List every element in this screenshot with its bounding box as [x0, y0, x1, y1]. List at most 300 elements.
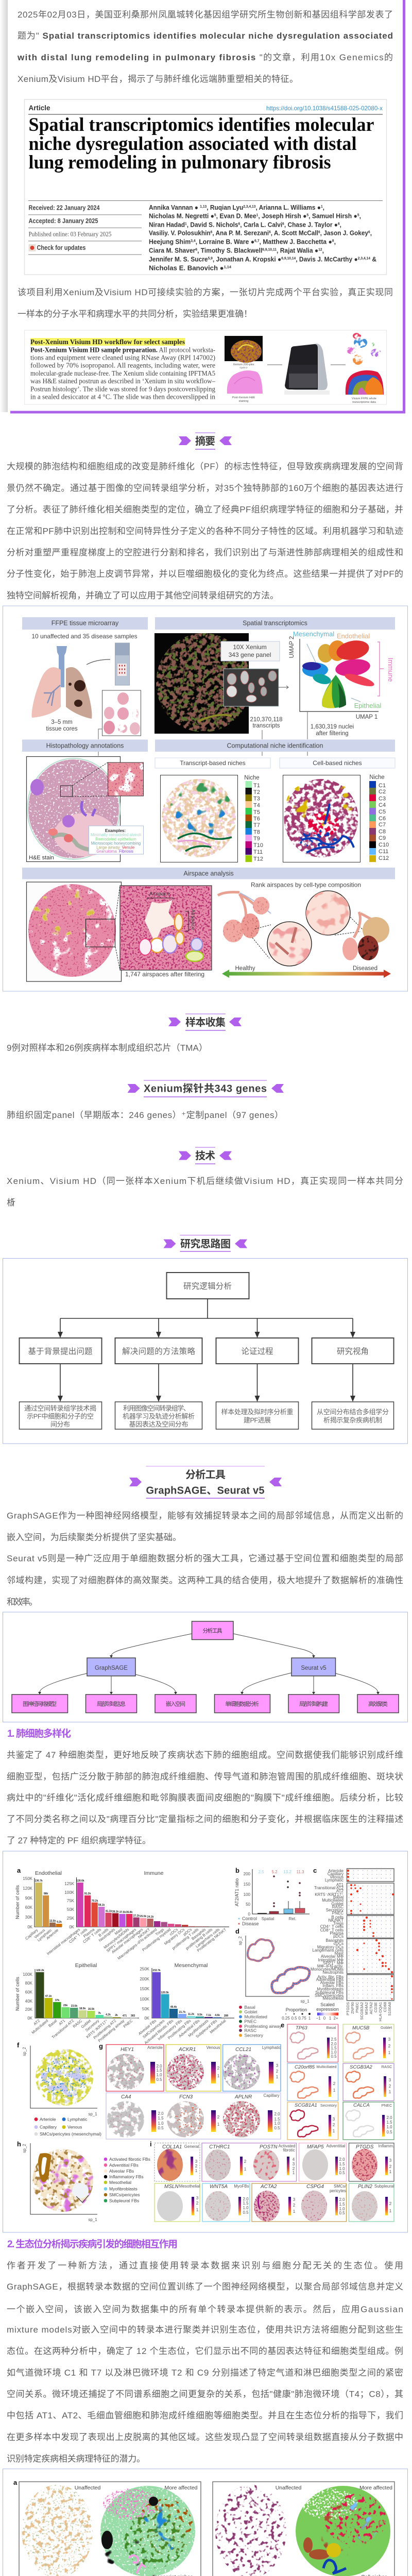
panel: figure 2 niche analysis: a [13, 2479, 18, 2486]
i: ACTA2 and CSPG4: 1.0 [339, 2207, 345, 2211]
callout: 10X Xenium panel: 10X Xenium [233, 643, 267, 651]
legend: transcript niches: T10 [253, 842, 263, 849]
text: analysis tools: 和效率。 [7, 1597, 38, 1607]
text: section 2: mixture models对嵌入空间中的转录本进行聚类并识别生态位，使用共识方法将细胞分配到这些生 [7, 2325, 403, 2335]
node: detail 1 [20, 1402, 102, 1429]
chart a: epithelial bars: RASC [72, 2018, 83, 2029]
text: technology [7, 1176, 403, 1208]
i: ACTA2 and CSPG4: pericytes [330, 2189, 346, 2193]
paper title screenshot: https://doi.org/10.1038/s41588-025-02080-x [266, 105, 383, 112]
paper title screenshot: , Timothy S. Blackwell [197, 247, 262, 255]
e: MUC5B: 3 [388, 2037, 391, 2042]
chart a: mesenchymal bars: 150K [140, 1987, 150, 1991]
i: MFAP5 [299, 2143, 346, 2181]
image: H&E stain annotation [27, 756, 143, 861]
chart a: mesenchymal bars: Inflammatory FBs [157, 2018, 183, 2041]
node: detail 1: 间分布 [50, 1420, 70, 1428]
illustration: lungs: tissue cores [46, 726, 78, 732]
legend: airway cell types: Multiciliated [244, 2014, 267, 2020]
paper title screenshot: 1,13 [200, 205, 207, 209]
methods screenshot: post-Xenium Visium HD workflow: in a sealed desiccator at 4 °C. The slide was then decoverslipped in [30, 393, 215, 401]
legend: annotation examples: Remodeled epithelium [95, 837, 136, 842]
paper title screenshot: , [322, 247, 324, 255]
chart a: epithelial bars: Multiciliated [30, 2019, 49, 2035]
chart b: AT2/AT1 ratio box plot: Control [242, 1916, 257, 1921]
chart a: epithelial bars: 40K [25, 1999, 33, 2004]
e: CALCA: PNEC [382, 2103, 392, 2108]
e: SCGB1A1: 2 [333, 2123, 335, 2127]
node: perspective: 研究视角 [337, 1347, 369, 1356]
chart a: epithelial bars: 60K [25, 1990, 33, 1995]
i: MFAP5: 1.5 [339, 2162, 345, 2166]
chart c: marker dot plot: Alveolar FBs [320, 1980, 344, 1985]
paper title screenshot: Received: 22 January 2024 [29, 204, 100, 211]
panel: graphical overview figure: Rank airspaces by cell-type composition [251, 881, 361, 888]
chart c: marker dot plot: SPP1⁺ MΦ [323, 1961, 344, 1965]
paper title screenshot: , David S. Nichols [187, 222, 238, 229]
chart b: AT2/AT1 ratio box plot: 50 [246, 1902, 251, 1907]
chart c: marker dot plot: PTGDS [346, 2002, 350, 2015]
subheader: Transcript-based niches: Transcript-based niches [180, 759, 246, 767]
text: technology: Xenium、Visium HD（同一张样本Xenium下机后继续做Visium HD，真正实现同一样本共同分 [7, 1176, 403, 1186]
legend: airway cell types: Basal [244, 2005, 255, 2010]
chart c: marker dot plot: AT2 [336, 1889, 344, 1893]
paper title screenshot: , Ana P. M. Serezani [212, 230, 269, 237]
legend: transcript niches: T9 [253, 836, 260, 842]
chart: UMAP of all nuclei: UMAP 2 [289, 636, 295, 658]
chart: UMAP of Visium [347, 333, 381, 365]
node: method strategy [115, 1338, 202, 1364]
chart c: marker dot plot: Tregs [333, 1921, 344, 1926]
image: Xenium brain section: Cycle 2 [239, 366, 248, 369]
paper title screenshot: lung remodeling in pulmonary fibrosis [29, 152, 331, 173]
i: ACTA2 and CSPG4: ACTA2 [260, 2184, 277, 2190]
e: C20orf85: 1 [333, 2088, 336, 2093]
text: section 1: 细胞亚型，包括广泛分散于肺部的肺泡成纤维细胞、传导气道和肺泡管周围的肌成纤维细胞、斑块状 [7, 1772, 403, 1782]
e: CALCA [343, 2102, 394, 2140]
chart a: endothelial bars: 90K [25, 1896, 33, 1901]
chart c: marker dot plot: Alveolar MΦ [321, 1954, 344, 1959]
paper title screenshot: , [370, 230, 372, 237]
chart a: immune bars: Tregs [154, 1927, 165, 1937]
legend: cell niches [369, 774, 389, 862]
methods screenshot: post-Xenium Visium HD workflow: was H&E stained postrun as described in ‘Xenium in situ workflow– [30, 377, 215, 385]
chart c: marker dot plot: Basophils [325, 1938, 344, 1943]
legend: annotation examples: Fibrosis [119, 849, 133, 854]
chart d: airway spatial map: sp_1 [300, 1999, 310, 2004]
chart b: AT2/AT1 ratio box plot: Disease [242, 1921, 259, 1926]
e: SCGB3A2: RASC [382, 2064, 392, 2069]
paper title screenshot: Niran Hadad [149, 222, 187, 229]
i: ACTA2 and CSPG4 [252, 2183, 347, 2222]
image: slide montage of cores [102, 690, 141, 736]
chart c: marker dot plot: Mast [335, 1951, 344, 1956]
panel e: airway gene maps [281, 2021, 394, 2140]
chart a: mesenchymal bars: 100K [140, 1997, 150, 2002]
g: capillary markers: 0.5 [274, 2126, 280, 2130]
legend: airway cell types: Secretory [244, 2033, 264, 2038]
g: HEY1 [106, 2044, 164, 2091]
chart c: marker dot plot: SCGB3A2 [359, 2002, 364, 2020]
legend: proportion and scaled expression: 0.25 [282, 2016, 290, 2021]
heading: 样本收集 [168, 1014, 242, 1030]
g: ACKR1 [166, 2044, 221, 2091]
chart a: epithelial bars: AT1 [58, 2019, 66, 2026]
chart b: AT2/AT1 ratio box plot: Ret. [289, 1917, 296, 1921]
e: SCGB1A1: 3 [333, 2117, 335, 2122]
chart c: marker dot plot: AT1 [336, 1883, 344, 1887]
legend: proportion and scaled expression: Proportion [286, 2007, 307, 2012]
e: SCGB3A2 [343, 2063, 394, 2101]
chart h: mesenchymal spatial map: sp_1 [88, 2217, 97, 2222]
callout: 10X Xenium panel [221, 641, 280, 661]
chart a: epithelial bars: 23.6k [71, 2005, 77, 2008]
e: C20orf85 [287, 2063, 338, 2101]
paper title screenshot: , Jonathan A. Kropski ● [213, 256, 281, 263]
chart a: immune bars: 0K [69, 1925, 75, 1929]
g: ACKR1: Venous [207, 2045, 220, 2050]
node: 嵌入空间 [155, 1694, 196, 1713]
chart a: immune bars: Plasma [82, 1927, 96, 1939]
chart: UMAP of all nuclei [289, 630, 394, 720]
text: section 2: 如气道微环境 C1 和 T7 以及淋巴微环境 T2 和 C9 分别描述了特定气道和淋巴细胞类型之间的紧密 [7, 2368, 403, 2378]
i: MFAP5: 0.5 [339, 2171, 345, 2175]
chart a: epithelial bars: 20K [25, 2007, 33, 2012]
chart a: epithelial bars: 37k [55, 1999, 59, 2002]
e: SCGB1A1 [287, 2102, 338, 2140]
chart a: endothelial bars: Venous [33, 1927, 46, 1940]
node: 图神经网络模型: 图神经网络模型 [23, 1700, 57, 1707]
node: detail 1: 通过空间转录组学技术揭 [24, 1404, 96, 1412]
heading: 技术: 技术 [195, 1150, 215, 1162]
chart a: epithelial bars: Number of cells [15, 1977, 21, 2011]
header bar: Airspace analysis [22, 868, 395, 879]
paper title screenshot: , Lorraine B. Ware ● [196, 238, 254, 245]
chart c: marker dot plot: PNEC [332, 1911, 344, 1916]
image: H&E brain section: staining [239, 400, 248, 403]
g: HEY1: 2.0 [156, 2064, 162, 2069]
legend: h cell types [104, 2157, 150, 2203]
paper title screenshot: Annika Vannan ● [149, 204, 201, 211]
e: SCGB1A1: 1 [333, 2129, 335, 2133]
chart a: immune bars: Alveolar macrophages [111, 1927, 144, 1955]
e: CALCA: 1.0 [386, 2125, 392, 2129]
e: TP63: TP63 [296, 2025, 307, 2031]
intro text continued [18, 287, 393, 319]
chart a: mesenchymal bars: 9.5k [197, 2013, 202, 2016]
panel: graphical overview figure [3, 606, 408, 991]
heading: 摘要: 摘要 [195, 435, 215, 447]
chart a: mesenchymal bars: 49.4k [170, 2006, 177, 2009]
chart a: endothelial bars: 150K [23, 1876, 33, 1881]
paper title screenshot [25, 99, 386, 275]
paper title screenshot: Check for updates [37, 244, 86, 251]
chart a: immune bars: 70.2k [92, 1900, 98, 1903]
paper title screenshot: 6,9,10,14 [281, 257, 296, 261]
subheader: Transcript-based niches [155, 758, 270, 768]
chart c: marker dot plot: cDCs [333, 1941, 344, 1946]
abstract text: 分析对重塑严重程度梯度上的空腔进行分割和排名，我们识别出了与渐进性肺部病理相关的组成性和 [7, 548, 403, 557]
g: capillary markers: 0.5 [158, 2126, 164, 2130]
image: H&E brain section: Post-Xenium H&E [232, 396, 255, 399]
e: MUC5B: MUC5B [352, 2025, 370, 2031]
chart a: epithelial bars: 4.2k [106, 2013, 111, 2016]
text: analysis tools: 嵌入空间，为后续聚类分析提供了坚实基础。 [7, 1532, 181, 1543]
icon: microarray slide [115, 643, 130, 685]
paper title screenshot: 6 [238, 223, 240, 226]
i: CTHRC1 and POSTN: POSTN [260, 2144, 278, 2150]
node: background question [20, 1338, 102, 1364]
g: capillary markers: 1.0 [158, 2121, 164, 2126]
g: HEY1: Arteriole [147, 2045, 163, 2050]
chart a: epithelial bars: Goblet [80, 2018, 92, 2029]
node: detail 3: 建PF进展 [244, 1416, 271, 1424]
legend: proportion and scaled expression: −1 [316, 2016, 321, 2021]
chart a: endothelial bars: Endothelial [35, 1870, 62, 1876]
image: H&E brain section [227, 370, 263, 403]
node: 局部邻域信息: 局部邻域信息 [97, 1700, 126, 1707]
i: MSLN: 3 [196, 2196, 199, 2200]
g: ACKR1: ACKR1 [178, 2047, 196, 2053]
chart c: marker dot plot: Lymphatic [325, 1878, 344, 1883]
chart a: endothelial bars: 0K [27, 1925, 33, 1929]
chart a: immune bars: 50K [67, 1907, 75, 1912]
node: detail 2: 利用图像空间转录组学、 [123, 1404, 190, 1412]
legend: proportion and scaled expression: 0.75 [298, 2016, 306, 2021]
header bar: Histopathology annotations: Histopathology annotations [46, 742, 124, 749]
image: airspace zoom inset: Airspace [190, 909, 196, 930]
labels: transcripts and nuclei counts: 210,370,118 [250, 717, 283, 723]
i: PLIN2: 2 [389, 2201, 392, 2206]
i: CTHRC1 and POSTN: CTHRC1 [209, 2144, 230, 2150]
legend: cell niches: C5 [379, 809, 386, 815]
text: section 2: 中包括 AT1、AT2、毛细血管细胞和肺泡成纤维细胞等细胞类型。并且在生态位分析的指导下，我们 [7, 2411, 403, 2420]
node: detail 2: 基因表达及空间分布 [129, 1420, 188, 1428]
chart c: marker dot plot: B cells [331, 1915, 344, 1920]
g: CCL21: CCL21 [235, 2047, 251, 2053]
labels: transcripts and nuclei counts [98, 711, 354, 739]
chart a: mesenchymal bars: 0K [144, 2016, 150, 2021]
image: airspace core [27, 882, 122, 981]
chart a: immune bars: 37.5k [119, 1911, 126, 1914]
chart a: mesenchymal bars: 233.7k [152, 1969, 161, 1972]
legend: h cell types: Myofibroblasts [109, 2187, 138, 2192]
chart b: AT2/AT1 ratio box plot: AT2/AT1 ratio [234, 1878, 239, 1906]
paper title screenshot: 5,9 [208, 257, 213, 261]
intro text continued: 该项目利用Xenium及Visium HD可接续实验的方案，一张切片完成两个平台实验，真正实现同 [18, 287, 393, 297]
paper title screenshot: Published online: 03 February 2025 [29, 231, 111, 238]
chart c: marker dot plot: Capillary [328, 1872, 344, 1876]
i: MSLN: 1 [196, 2208, 199, 2212]
g: HEY1: HEY1 [121, 2047, 134, 2053]
arrow [267, 364, 282, 365]
chart a: immune bars: pDCs [182, 1927, 193, 1937]
panel: graphical overview figure: 1,747 airspaces after filtering [125, 971, 204, 978]
i: COL1A1: 2 [195, 2164, 198, 2168]
panel: tools flowchart [3, 1612, 408, 1722]
paper title screenshot: & [370, 256, 376, 263]
chart a: mesenchymal bars: 11.2k [188, 2013, 194, 2016]
legend: f cell types: Capillary [40, 2125, 57, 2130]
paper title screenshot: 6,7 [254, 239, 260, 243]
chart a: immune bars: CD4⁺ T cells [68, 1927, 88, 1944]
chart a: immune bars: 128.6k [76, 1879, 84, 1883]
legend: airway cell types: RASC [244, 2028, 256, 2033]
chart a: mesenchymal bars: SMCs/pericytes [142, 2018, 165, 2039]
paper title screenshot: 1 [256, 213, 259, 217]
image: Xenium brain section [225, 336, 263, 369]
legend: transcript niches: T7 [253, 822, 260, 828]
paper title screenshot: 6 [282, 223, 284, 226]
panel: graphical overview figure: 10 unaffected and 35 disease samples [31, 633, 138, 640]
text: analysis tools: 邻域构建，实现了对细胞群体的高效聚类。这两种工具的结合使用，极大地提升了数据解析的准确性 [7, 1575, 403, 1585]
e: TP63: 1.0 [331, 2050, 337, 2055]
chart a: mesenchymal bars: 250K [140, 1967, 150, 1971]
i: PLIN2 [349, 2183, 394, 2222]
chart c: marker dot plot: CD4⁺ T cells [320, 1924, 344, 1929]
paper title screenshot: Heejung Shim [149, 238, 192, 245]
chart a: epithelial bars: 16.5k [88, 2008, 94, 2011]
panel i: fibroblast gene maps: i [150, 2140, 152, 2148]
chart a: immune bars: CD8⁺ T cells [82, 1927, 102, 1944]
i: WNT5A [202, 2183, 250, 2222]
i: PTGDS [349, 2143, 394, 2181]
paper title screenshot: 5 [357, 213, 359, 217]
g: HEY1: 0.5 [156, 2077, 162, 2082]
paper title screenshot: , Samuel Hirsh ● [308, 212, 357, 219]
g: capillary markers: 1.5 [274, 2117, 280, 2122]
i: MSLN: 2 [196, 2201, 199, 2206]
legend: airway cell types: PNEC [244, 2019, 256, 2024]
illustration: healthy to diseased alveoli [218, 891, 389, 966]
i: MFAP5: 2.0 [339, 2157, 345, 2162]
chart a: endothelial bars: a [17, 1867, 21, 1874]
paper title screenshot: , Evan D. Mee [216, 212, 256, 219]
chart a: immune bars: 41.1k [106, 1910, 112, 1913]
legend: cell niches: C11 [379, 849, 388, 855]
chart a: immune bars: Mast [114, 1927, 124, 1936]
chart a: endothelial bars: 120K [23, 1886, 33, 1891]
e: MUC5B [343, 2024, 394, 2062]
paper title screenshot: 3,4 [191, 239, 196, 243]
legend: cell niches: C4 [379, 802, 386, 808]
i: COL1A1: General [184, 2144, 199, 2149]
chart c: marker dot plot: CD68 [383, 2002, 387, 2012]
header bar: Airspace analysis: Airspace analysis [183, 870, 234, 877]
chart a: immune bars: cDCs [168, 1927, 179, 1937]
chart c: marker dot plot: Neutrophils [323, 1970, 344, 1975]
e: TP63: 1.5 [331, 2046, 337, 2050]
paper title screenshot: , Chase J. Taylor ● [284, 222, 338, 229]
header bar: Spatial transcriptomics [155, 617, 395, 630]
abstract text: 在正常和PF肺中识别出控制和空间特异性分子定义的各种不同分子特性的区域。利用机器学习和轨迹 [7, 527, 403, 536]
chart h: mesenchymal spatial map [17, 2140, 150, 2222]
chart c: marker dot plot: SMCs/pericytes [315, 1993, 344, 1998]
chart b: AT2/AT1 ratio box plot: 0 [248, 1912, 251, 1917]
node: detail 3: 样本处理及拟时序分析重 [221, 1408, 294, 1416]
i: PLIN2: 1 [389, 2209, 392, 2213]
methods screenshot: post-Xenium Visium HD workflow: tions and equipment were cleaned using RNase Away (RPI 147002) [30, 353, 215, 362]
methods screenshot: post-Xenium Visium HD workflow [25, 330, 386, 404]
legend: transcript niches: T8 [253, 829, 260, 836]
text: section 1: 病灶中的"纤维化"活化成纤维细胞和毗邻胸膜表面间皮细胞的"胸膜下"成纤维细胞。后续分析，比较 [7, 1793, 403, 1803]
i: ACTA2 and CSPG4: 2 [293, 2203, 296, 2208]
legend: cell niches: C12 [379, 855, 389, 861]
chart a: mesenchymal bars: Proliferating FBs [167, 2018, 192, 2040]
chart c: marker dot plot: MS4A2 [364, 2002, 369, 2015]
i: CTHRC1 and POSTN: 4 [293, 2157, 295, 2162]
node: root [167, 1273, 249, 1299]
e: TP63 [287, 2024, 338, 2062]
i: ACTA2 and CSPG4: 3 [293, 2197, 296, 2202]
i: CTHRC1 and POSTN: 3 [293, 2162, 295, 2166]
chart b: AT2/AT1 ratio box plot: 150 [244, 1882, 251, 1887]
node: detail 3 [216, 1402, 299, 1429]
labels: transcripts and nuclei counts: after filtering [316, 731, 349, 737]
chart c: marker dot plot: Adventitial FBs [316, 1977, 344, 1982]
chart a: endothelial bars: 98k [44, 1892, 48, 1895]
chart a: endothelial bars: 9.2k [57, 1921, 62, 1924]
chart a: immune bars: Langerhans cells [195, 1927, 220, 1948]
chart a: immune bars: Immune [144, 1870, 164, 1876]
g: CCL21: 3 [276, 2063, 279, 2068]
node: 局部邻域信息 [85, 1694, 137, 1713]
e: MUC5B: 1 [388, 2050, 391, 2055]
intro text: 题为" Spatial transcriptomics identifies molecular niche dysregulation associated [18, 31, 393, 41]
node: GraphSAGE [87, 1658, 135, 1676]
image: transcript niches: Unaffected [75, 2485, 100, 2491]
chart d: airway spatial map [235, 1927, 310, 2004]
text: analysis tools [7, 1511, 403, 1607]
chart a: immune bars: Interstitial macrophages [46, 1927, 81, 1956]
e: SCGB3A2: 3 [389, 2078, 391, 2082]
chart f: endothelial spatial map: sp_1 [88, 2112, 97, 2116]
i: CTHRC1 and POSTN: 2 [244, 2159, 247, 2164]
text: section 1: 共鉴定了 47 种细胞类型，更好地反映了疾病状态下肺的细胞组成。空间数据使我们能够识别成纤维 [7, 1750, 403, 1760]
legend: cell niches: C6 [379, 816, 386, 822]
panel: research logic flowchart [3, 1258, 408, 1444]
chart a: endothelial bars: Capillary [24, 1927, 39, 1941]
chart a: epithelial bars: Transitional AT2 [51, 2019, 75, 2040]
chart: cell niche map [283, 775, 360, 862]
chart a: immune bars: 39.1k [112, 1910, 118, 1913]
illustration: lungs [32, 646, 92, 732]
legend: h cell types: Activated fibrotic FBs [109, 2157, 150, 2162]
chart a: mesenchymal bars: 200K [140, 1977, 150, 1981]
abstract text: 景仍然不确定。通过基于图像的空间转录组学分析，对35个独特肺部的160万个细胞的基因表达进行 [7, 483, 403, 493]
legend: proportion and scaled expression: expression [316, 2007, 339, 2012]
node: GraphSAGE: GraphSAGE [95, 1665, 128, 1671]
legend: transcript niches: T5 [253, 809, 260, 816]
i: COL1A1: COL1A1 [162, 2144, 182, 2150]
node: 局部邻域构建 [288, 1694, 339, 1713]
chart c: marker dot plot: Transitional AT2 [314, 1886, 344, 1890]
text: analysis tools: GraphSAGE作为一种图神经网络模型，能够有效捕捉转录本之间的局部邻域信息，从而定义出新的 [7, 1511, 403, 1521]
heading: 摘要 [179, 433, 232, 449]
i: WNT5A: 2.0 [243, 2197, 249, 2201]
paper title screenshot: 12 [318, 248, 322, 251]
i: PTGDS: 3 [389, 2158, 392, 2163]
legend: h cell types: Inflammatory FBs [109, 2174, 144, 2179]
chart c: marker dot plot: c [313, 1867, 317, 1874]
i: WNT5A: 0.5 [243, 2210, 249, 2215]
abstract text: 了分析。表征了肺纤维化相关细胞类型的定位，确立了经典PF组织病理学特征的细胞和分子基础，并 [7, 505, 403, 514]
chart c: marker dot plot: Subpleural FBs [315, 1990, 344, 1995]
subheader: Cell-based niches: Cell-based niches [313, 759, 362, 767]
heading: section 1: 1. 肺细胞多样化 [7, 1728, 71, 1739]
node: 单细胞数据分析 [214, 1694, 270, 1713]
chart a: immune bars: proliferating B cells [185, 1927, 213, 1951]
